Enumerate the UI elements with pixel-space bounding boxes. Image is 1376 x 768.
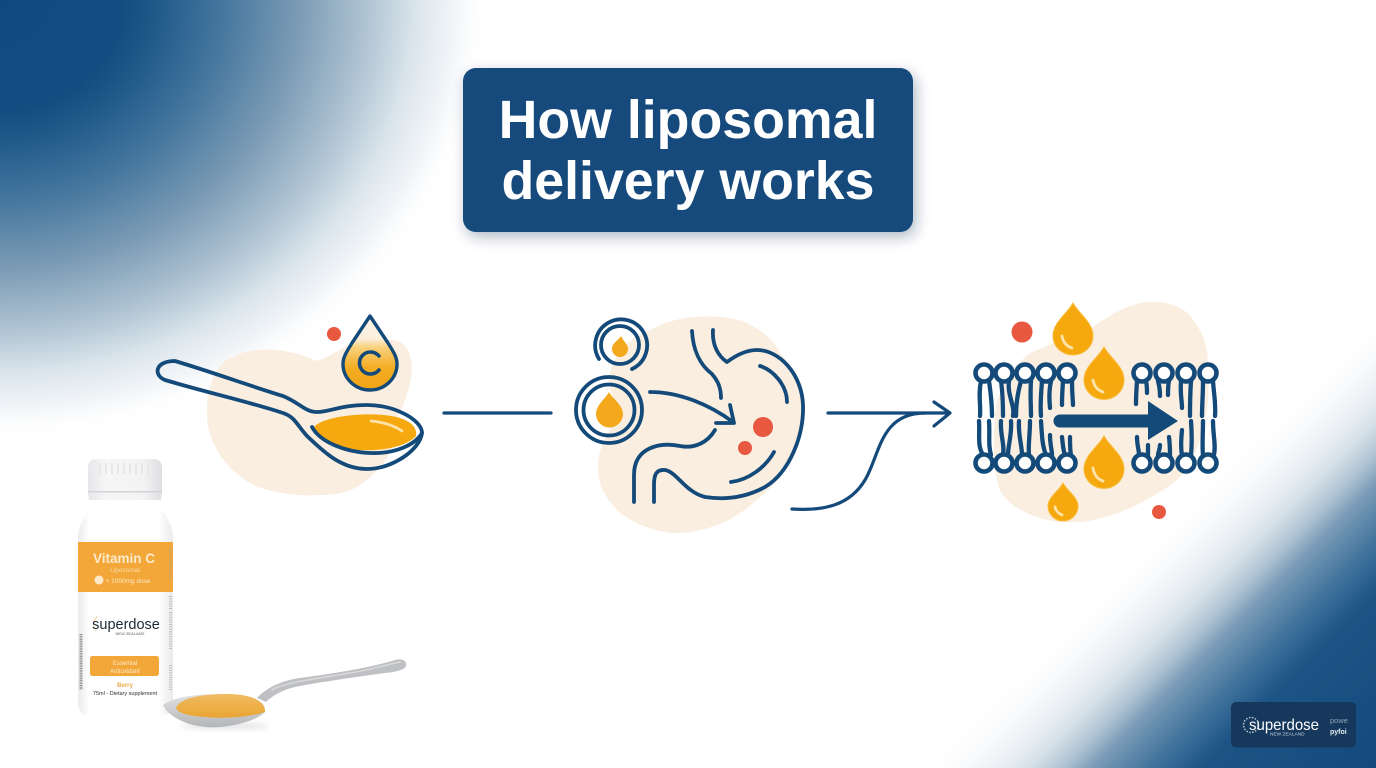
icon: drop 1 [1053, 303, 1093, 355]
icon: passage arrow [1054, 401, 1178, 440]
spoon shadow [180, 723, 270, 729]
icon: membrane heads [976, 364, 1216, 472]
icon: inner stomach arc [760, 366, 787, 402]
icon: drop 3 [1084, 436, 1124, 489]
side print [169, 548, 172, 690]
title: How liposomal [499, 90, 877, 150]
bottle body [78, 502, 173, 716]
label badge: Antioxidant [110, 669, 140, 675]
arrow: step 2 to step 3 [792, 402, 950, 509]
icon: membrane tails [979, 381, 1215, 455]
icon: red dot [327, 327, 341, 341]
product: supplement bottle [78, 459, 173, 716]
label text: dose [94, 576, 151, 585]
barcode [80, 634, 82, 690]
blob: step 2 background [598, 316, 802, 533]
step 1: spoon with vitamin C drop [158, 316, 422, 495]
label text: dietary supplement: 75ml - Dietary supplement [93, 691, 158, 697]
icon: spoon fluid [314, 414, 416, 450]
blob: step 1 background [207, 340, 412, 495]
blob: step 3 background [994, 302, 1209, 522]
icon: small liposome [595, 319, 647, 369]
product: spoon with syrup [163, 659, 406, 729]
label band [78, 542, 173, 592]
step 3: lipid bilayer [976, 302, 1216, 522]
icon: spoon bowl rim [312, 427, 422, 453]
label badge [90, 656, 159, 676]
logo badge [1231, 702, 1356, 748]
spoon syrup [176, 694, 265, 718]
label text: Berry: Berry [117, 683, 133, 689]
title: delivery works [501, 151, 875, 211]
icon: vitamin C drop [343, 316, 397, 390]
label text: Vitamin C: Vitamin C [93, 551, 155, 566]
icon: red dot [1012, 322, 1032, 342]
icon: inner stomach arc [731, 452, 774, 482]
partner text: pyfoi: pyfoi [1330, 729, 1347, 736]
icon: spoon outline [158, 361, 422, 469]
icon: stomach outline [654, 330, 803, 502]
icon: curved arrow [650, 392, 734, 423]
icon: large liposome [576, 377, 642, 443]
spoon bowl [163, 694, 265, 727]
partner text: powe: powe [1330, 716, 1348, 725]
label badge: Essential [113, 661, 137, 667]
bottle cap [88, 459, 162, 500]
icon: intestine line [634, 430, 715, 502]
icon: esophagus line [692, 331, 721, 398]
step 2: digestive tract [576, 316, 803, 533]
arrow: step 1 to step 2 [444, 411, 551, 415]
icon: red dot [1152, 505, 1166, 519]
icon: red dots [738, 417, 773, 455]
icon: fluid highlight [371, 421, 402, 431]
logo wordmark: superdose [1249, 717, 1319, 734]
title box [463, 68, 913, 232]
label brand: superdose: superdose [92, 617, 160, 633]
label text: Liposomal: Liposomal [110, 567, 140, 574]
icon: drop 2 [1084, 347, 1124, 400]
icon: drop 4 [1048, 483, 1078, 521]
label text: brand subline: NEW ZEALAND [116, 631, 145, 636]
spoon handle [257, 659, 406, 702]
label text: dose: + 1000mg dose [106, 578, 151, 585]
logo ring [1244, 718, 1258, 732]
logo subtitle: NEW ZEALAND [1270, 732, 1305, 738]
